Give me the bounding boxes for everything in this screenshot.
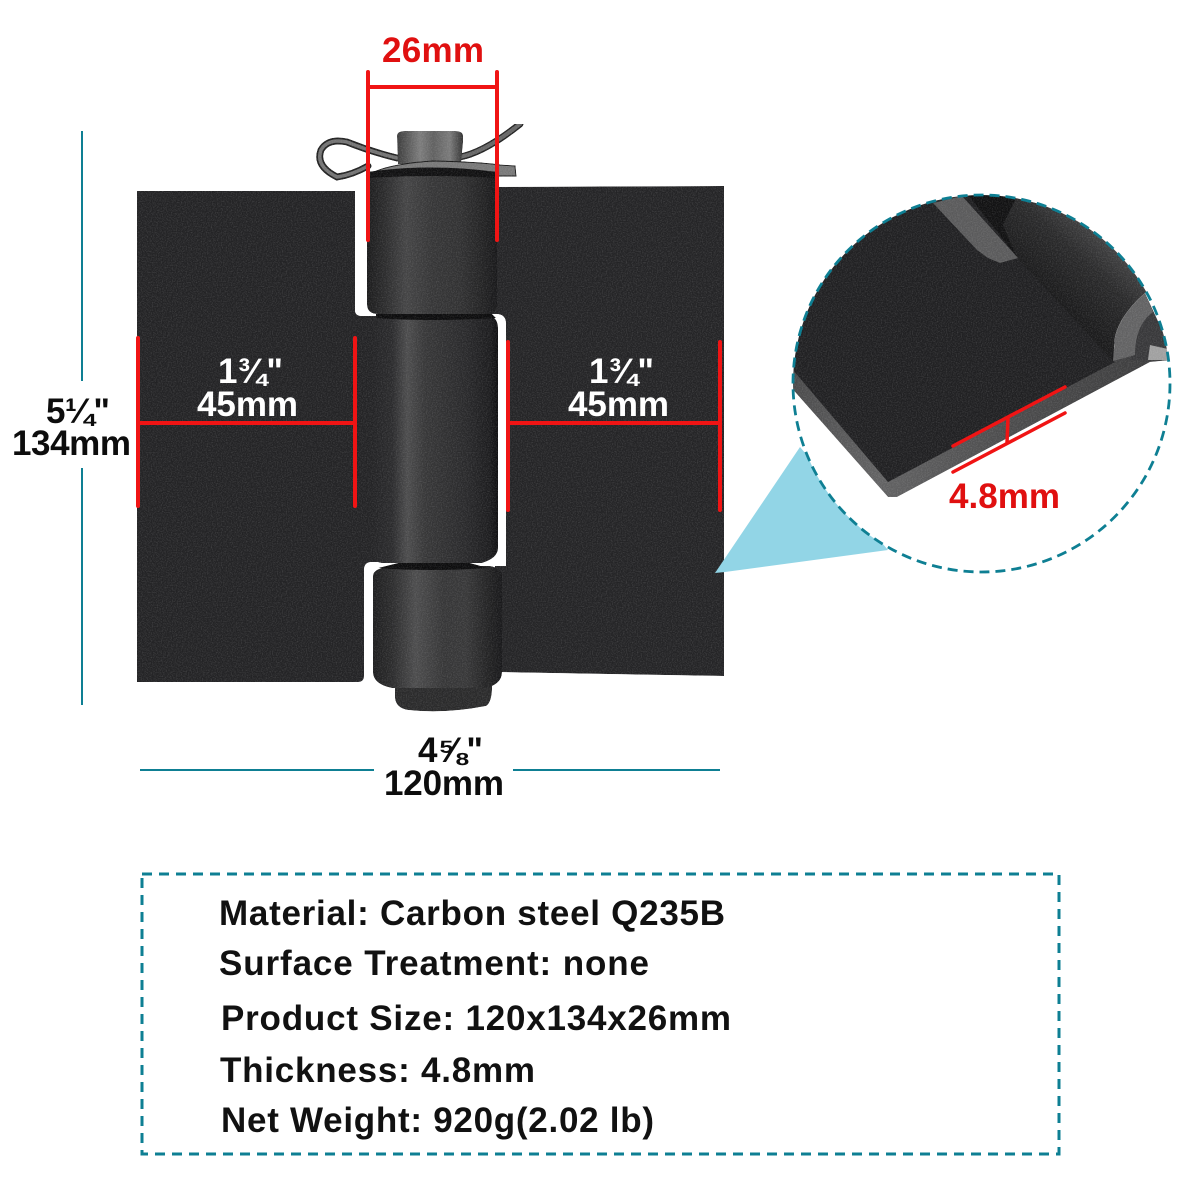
- cotter pin: [320, 124, 520, 177]
- dimension: 26mm: 26mm: [382, 31, 484, 70]
- pin foot: [395, 680, 492, 711]
- shim: [933, 196, 1018, 263]
- dimension: height: 5¼": [46, 392, 110, 431]
- dimension: right leaf: 45mm: [568, 385, 669, 424]
- dimension: height: 134mm: [12, 424, 131, 463]
- label: 4.8mm: 4.8mm: [949, 477, 1060, 516]
- rolled barrel: [1003, 198, 1146, 360]
- callout wedge: [715, 447, 888, 573]
- hinge photo: [137, 124, 724, 711]
- dimension: width: [140, 731, 720, 803]
- barrel end cap: [1113, 293, 1153, 361]
- dimension: left leaf: 45mm: [197, 385, 298, 424]
- dimension: 26mm: [368, 31, 497, 240]
- spec: surface: Surface Treatment: none: [219, 944, 649, 983]
- right leaf: [480, 186, 724, 676]
- bottom knuckle: [373, 566, 502, 688]
- spec: material: Material: Carbon steel Q235B: [219, 894, 725, 933]
- dimension: width: 120mm: [384, 764, 504, 803]
- dimension: left leaf: 1¾": [218, 352, 283, 391]
- dark gap behind barrel: [968, 195, 1016, 254]
- spec: weight: Net Weight: 920g(2.02 lb): [221, 1101, 654, 1140]
- top knuckle: [367, 169, 497, 314]
- specification box: [142, 874, 1059, 1154]
- spec: thickness: Thickness: 4.8mm: [220, 1051, 535, 1090]
- washer: [366, 161, 516, 176]
- plate edge: [788, 350, 1172, 497]
- middle knuckle: [372, 315, 498, 563]
- dimension: left leaf: [138, 338, 355, 506]
- dimension: right leaf: 1¾": [589, 352, 654, 391]
- dimension: height: [12, 131, 131, 705]
- dimension: right leaf: [508, 342, 720, 510]
- zoomed circle: [785, 180, 1176, 572]
- dashed ring: [793, 195, 1170, 572]
- pin head: [397, 131, 463, 164]
- plate top face: [785, 180, 1115, 482]
- pin end: [1135, 293, 1167, 350]
- thickness marker: [953, 387, 1065, 472]
- dimension: width: 4⅝": [418, 731, 483, 770]
- spec: size: Product Size: 120x134x26mm: [221, 999, 731, 1038]
- left leaf: [137, 191, 400, 682]
